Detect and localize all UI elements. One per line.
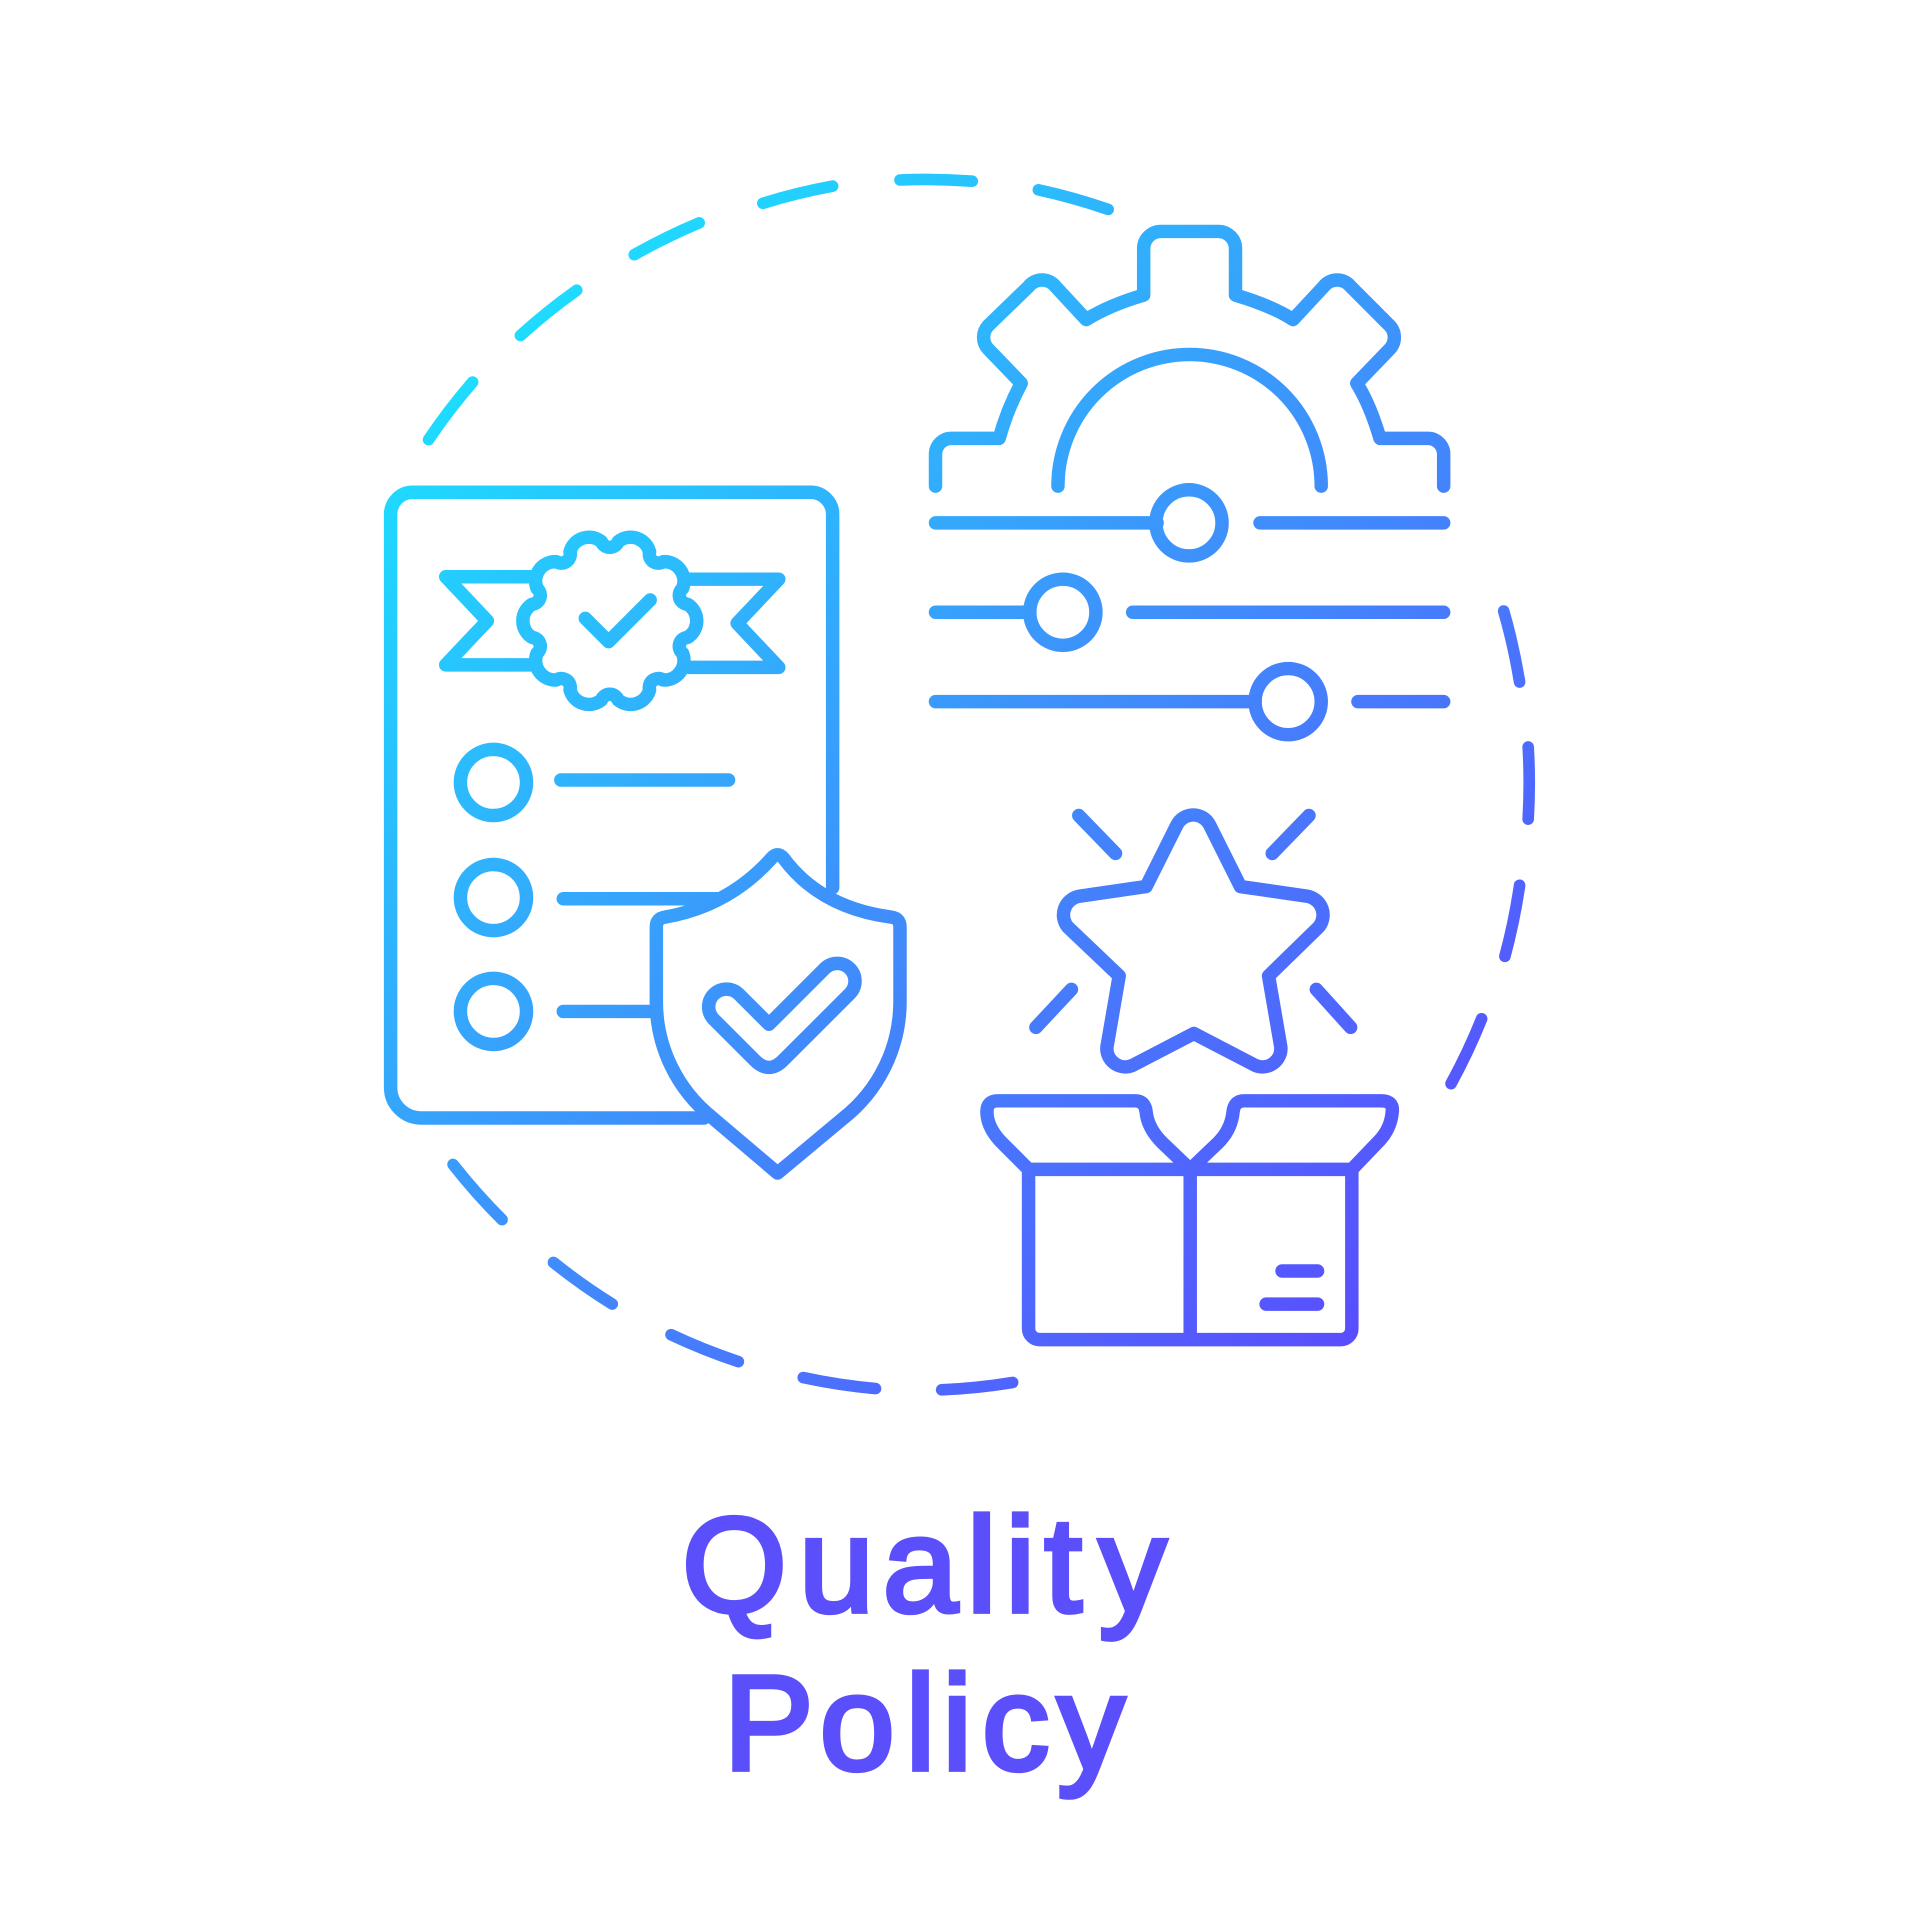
gear inner arc xyxy=(1058,354,1321,486)
document outline xyxy=(391,492,833,1118)
icon: shield with check xyxy=(656,855,900,1173)
shield check mark xyxy=(709,963,855,1067)
list item two xyxy=(460,864,722,931)
title line two: Policy xyxy=(724,1647,1125,1798)
shield outline xyxy=(656,855,900,1173)
dashed circle ring xyxy=(429,179,1529,1390)
icon: ribbon tails xyxy=(446,577,779,667)
panel: star and open box xyxy=(987,815,1392,1340)
slider one xyxy=(936,490,1444,556)
list item three xyxy=(460,978,661,1044)
list item one xyxy=(460,749,729,816)
panel: gear with sliders xyxy=(936,231,1444,735)
slider three xyxy=(936,669,1444,735)
sparkle rays xyxy=(1036,816,1351,1027)
icon: half gear xyxy=(936,231,1444,486)
icon: medal seal xyxy=(523,537,697,704)
icon: box flaps xyxy=(987,1101,1392,1169)
box label lines xyxy=(1266,1271,1318,1304)
icon: star xyxy=(1063,815,1323,1067)
title line one: Quality xyxy=(682,1489,1167,1640)
icon: medal check mark xyxy=(585,600,650,642)
icon: box body xyxy=(1029,1169,1352,1340)
panel: policy document xyxy=(391,492,833,1118)
title xyxy=(682,1489,1167,1798)
slider two xyxy=(936,579,1444,645)
